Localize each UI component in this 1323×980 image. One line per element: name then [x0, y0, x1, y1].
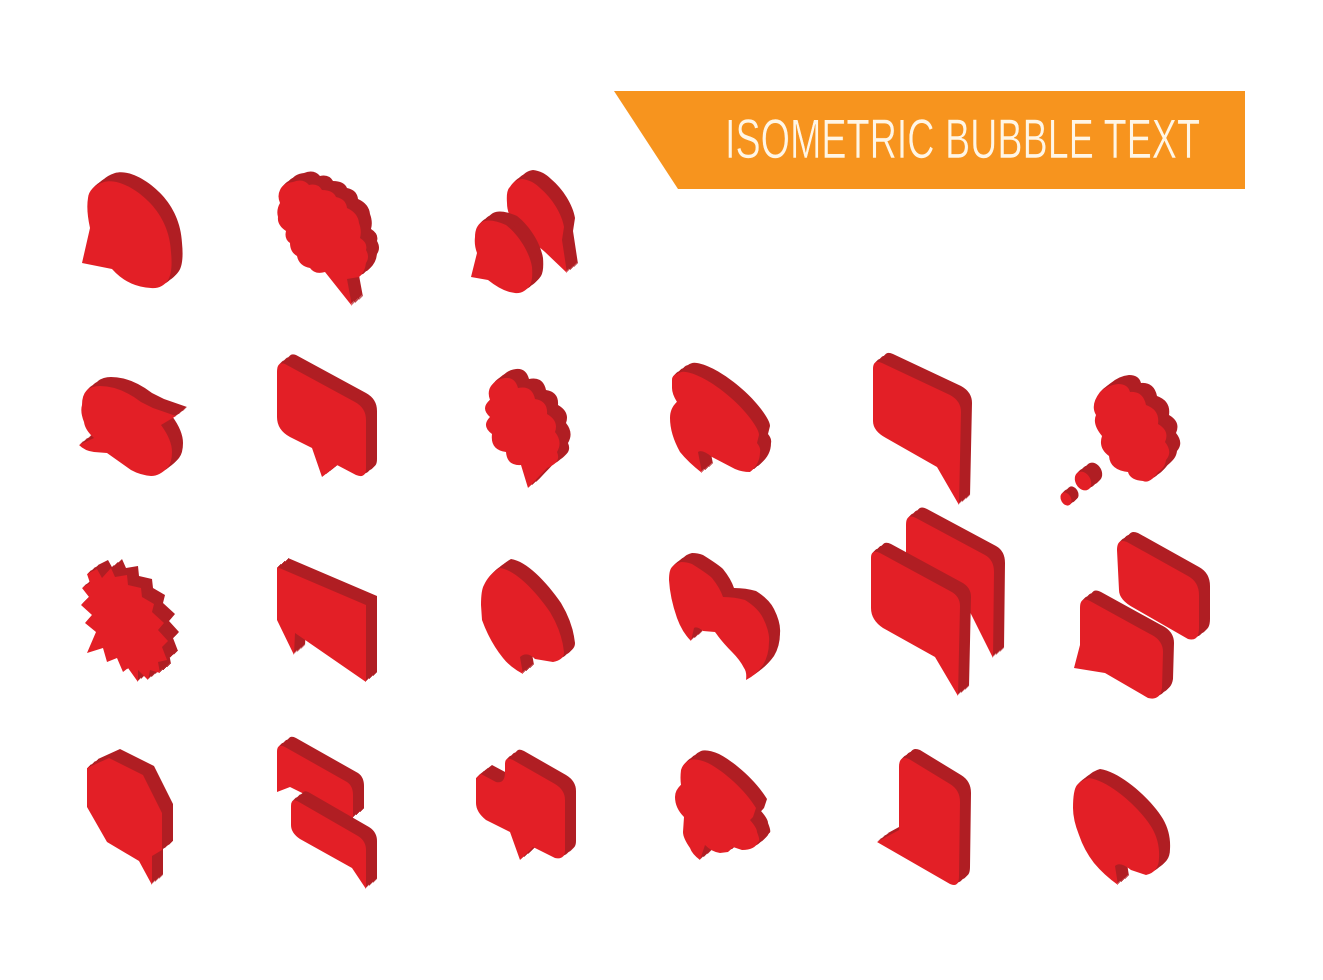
icon: cloud bubble (row 1) — [277, 181, 368, 306]
back bubble — [507, 179, 567, 273]
icon: oval bubble with small tail (row 4) — [1073, 778, 1159, 885]
icon: rounded rectangle bubble (row 2) — [277, 363, 366, 477]
icon: octagonal bubble (row 4) — [87, 758, 162, 885]
icon: two stacked long bubbles (row 4) — [277, 746, 366, 889]
icon: small cloud bubble (row 2) — [485, 378, 560, 488]
icon: lobed bubble with two notches (row 4) — [675, 759, 759, 860]
small dot — [1058, 490, 1074, 508]
icon: overlapping tall rectangle bubbles (row 3) — [871, 517, 994, 696]
back bubble — [906, 517, 994, 658]
cloud — [1094, 384, 1169, 482]
front bubble — [871, 552, 960, 696]
icon: two separate rounded rectangle bubbles (row 3) — [1074, 541, 1199, 699]
icon: bubble with flat bottom-left tail (row 4) — [877, 758, 960, 885]
icon: rounded rectangle bubble with long tail (row 2) — [873, 362, 961, 505]
icon: sharp rectangle bubble (row 3) — [277, 567, 366, 682]
icon: oval bubble with two tails (row 2) — [79, 386, 176, 476]
large dot — [1072, 469, 1094, 493]
lower bubble — [1074, 600, 1163, 699]
icon: round bubble tail left (row 1) — [82, 181, 172, 288]
icon: oval bubble with small tail (row 3) — [481, 568, 564, 674]
bottom bubble — [291, 800, 366, 889]
icon: notched rounded bubble (row 4) — [476, 759, 565, 860]
icon: double round bubbles (row 1) — [471, 179, 567, 293]
title banner — [614, 91, 1245, 189]
front bubble — [471, 221, 532, 293]
icon: lobed oval bubble (row 2) — [670, 372, 760, 473]
upper bubble — [1117, 541, 1199, 640]
icon: starburst bubble (row 3) — [81, 568, 168, 682]
icon: thought cloud with dots (row 2) — [1058, 384, 1169, 508]
icon: heart-like double lobe bubble (row 3) — [669, 562, 769, 680]
top bubble — [277, 746, 353, 818]
